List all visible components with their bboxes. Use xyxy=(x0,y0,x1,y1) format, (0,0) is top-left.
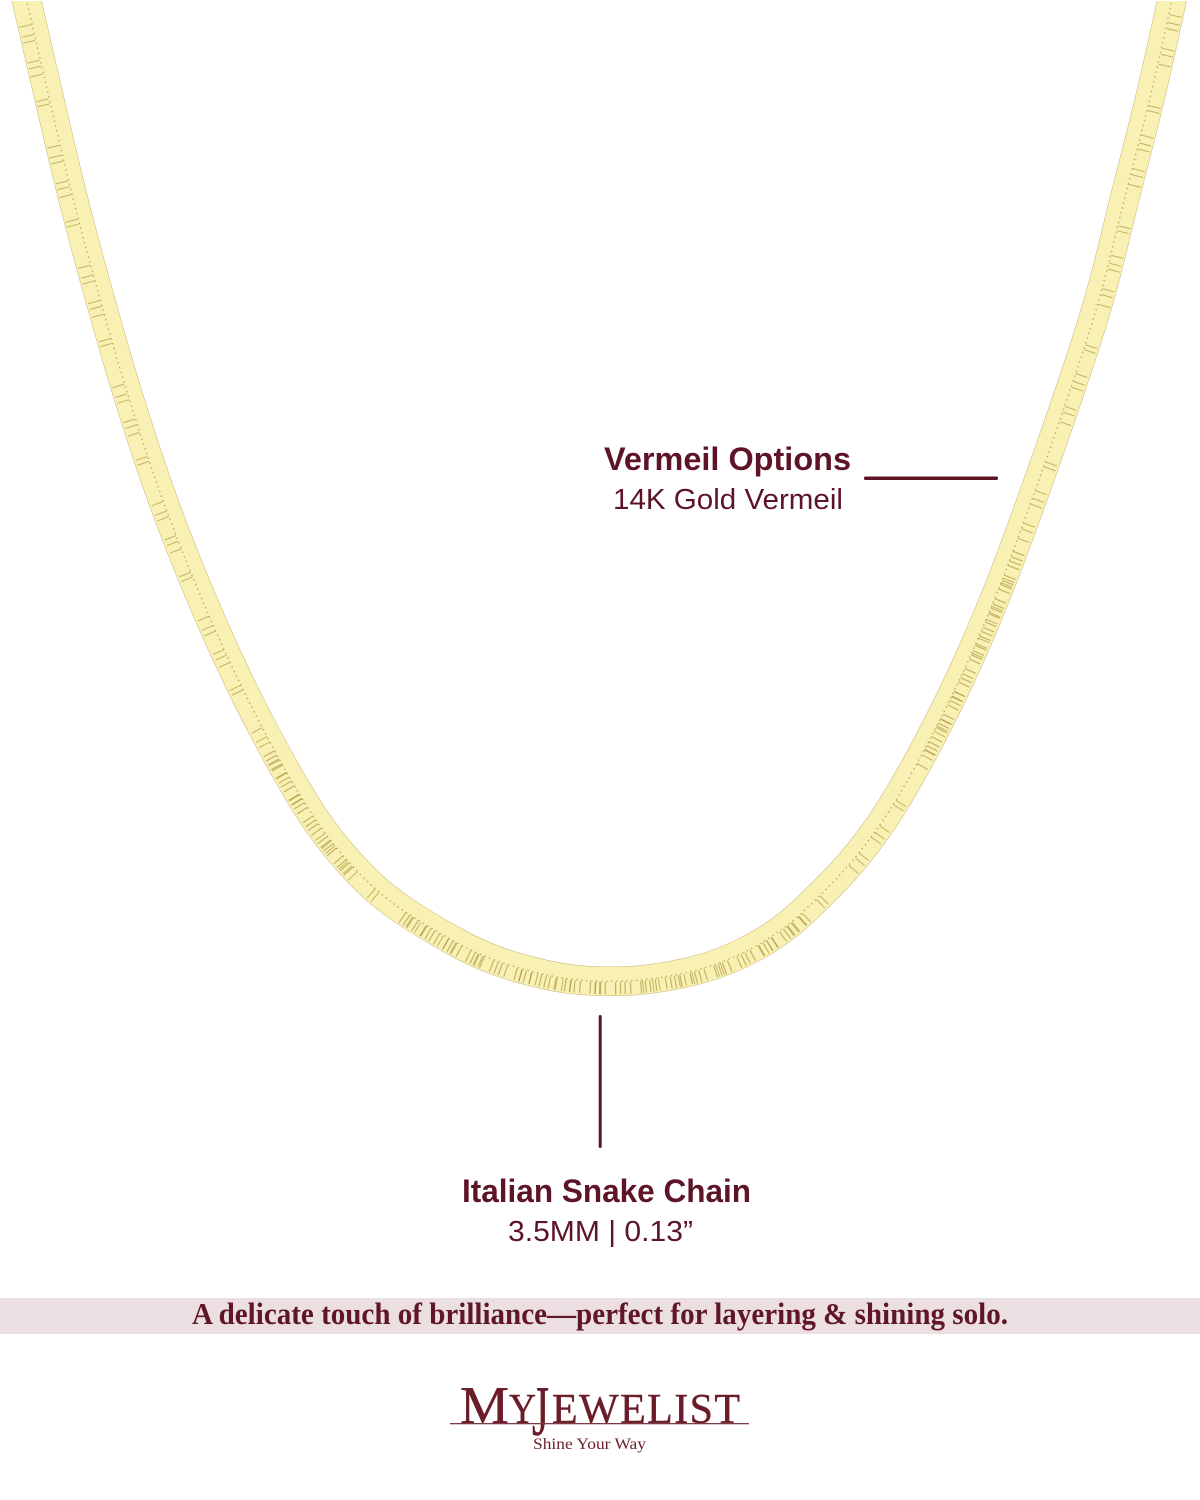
chain size: 3.5MM | 0.13” xyxy=(508,1216,693,1248)
callout: vermeil options xyxy=(604,441,851,516)
callout: chain specification xyxy=(462,1173,751,1248)
callout heading: Vermeil Options xyxy=(604,441,851,477)
callout detail: 14K Gold Vermeil xyxy=(613,484,843,516)
chain edge xyxy=(15,0,1184,981)
chain body xyxy=(15,0,1184,981)
logo wordmark xyxy=(460,1373,740,1451)
logo wordmark: EWELIST xyxy=(552,1387,740,1433)
logo slogan: Shine Your Way xyxy=(533,1436,646,1453)
tagline band xyxy=(0,1296,1200,1334)
chain heading: Italian Snake Chain xyxy=(462,1173,751,1209)
logo: MyJewelist xyxy=(450,1373,749,1453)
logo wordmark: Y xyxy=(509,1387,536,1433)
chain texture: dense ticks xyxy=(269,550,1020,988)
callout leader line: chain xyxy=(599,1015,602,1148)
chain texture: sparse ticks xyxy=(6,0,1193,988)
callout leader line: vermeil xyxy=(864,476,998,480)
logo wordmark: J xyxy=(532,1373,549,1451)
logo underline xyxy=(450,1423,749,1424)
necklace: gold snake chain xyxy=(6,0,1193,988)
logo wordmark: M xyxy=(460,1377,509,1435)
band background xyxy=(0,1298,1200,1334)
tagline text: A delicate touch of brilliance—perfect for layering & shining solo. xyxy=(192,1296,1008,1331)
chain centre dotted seam xyxy=(15,0,1184,981)
